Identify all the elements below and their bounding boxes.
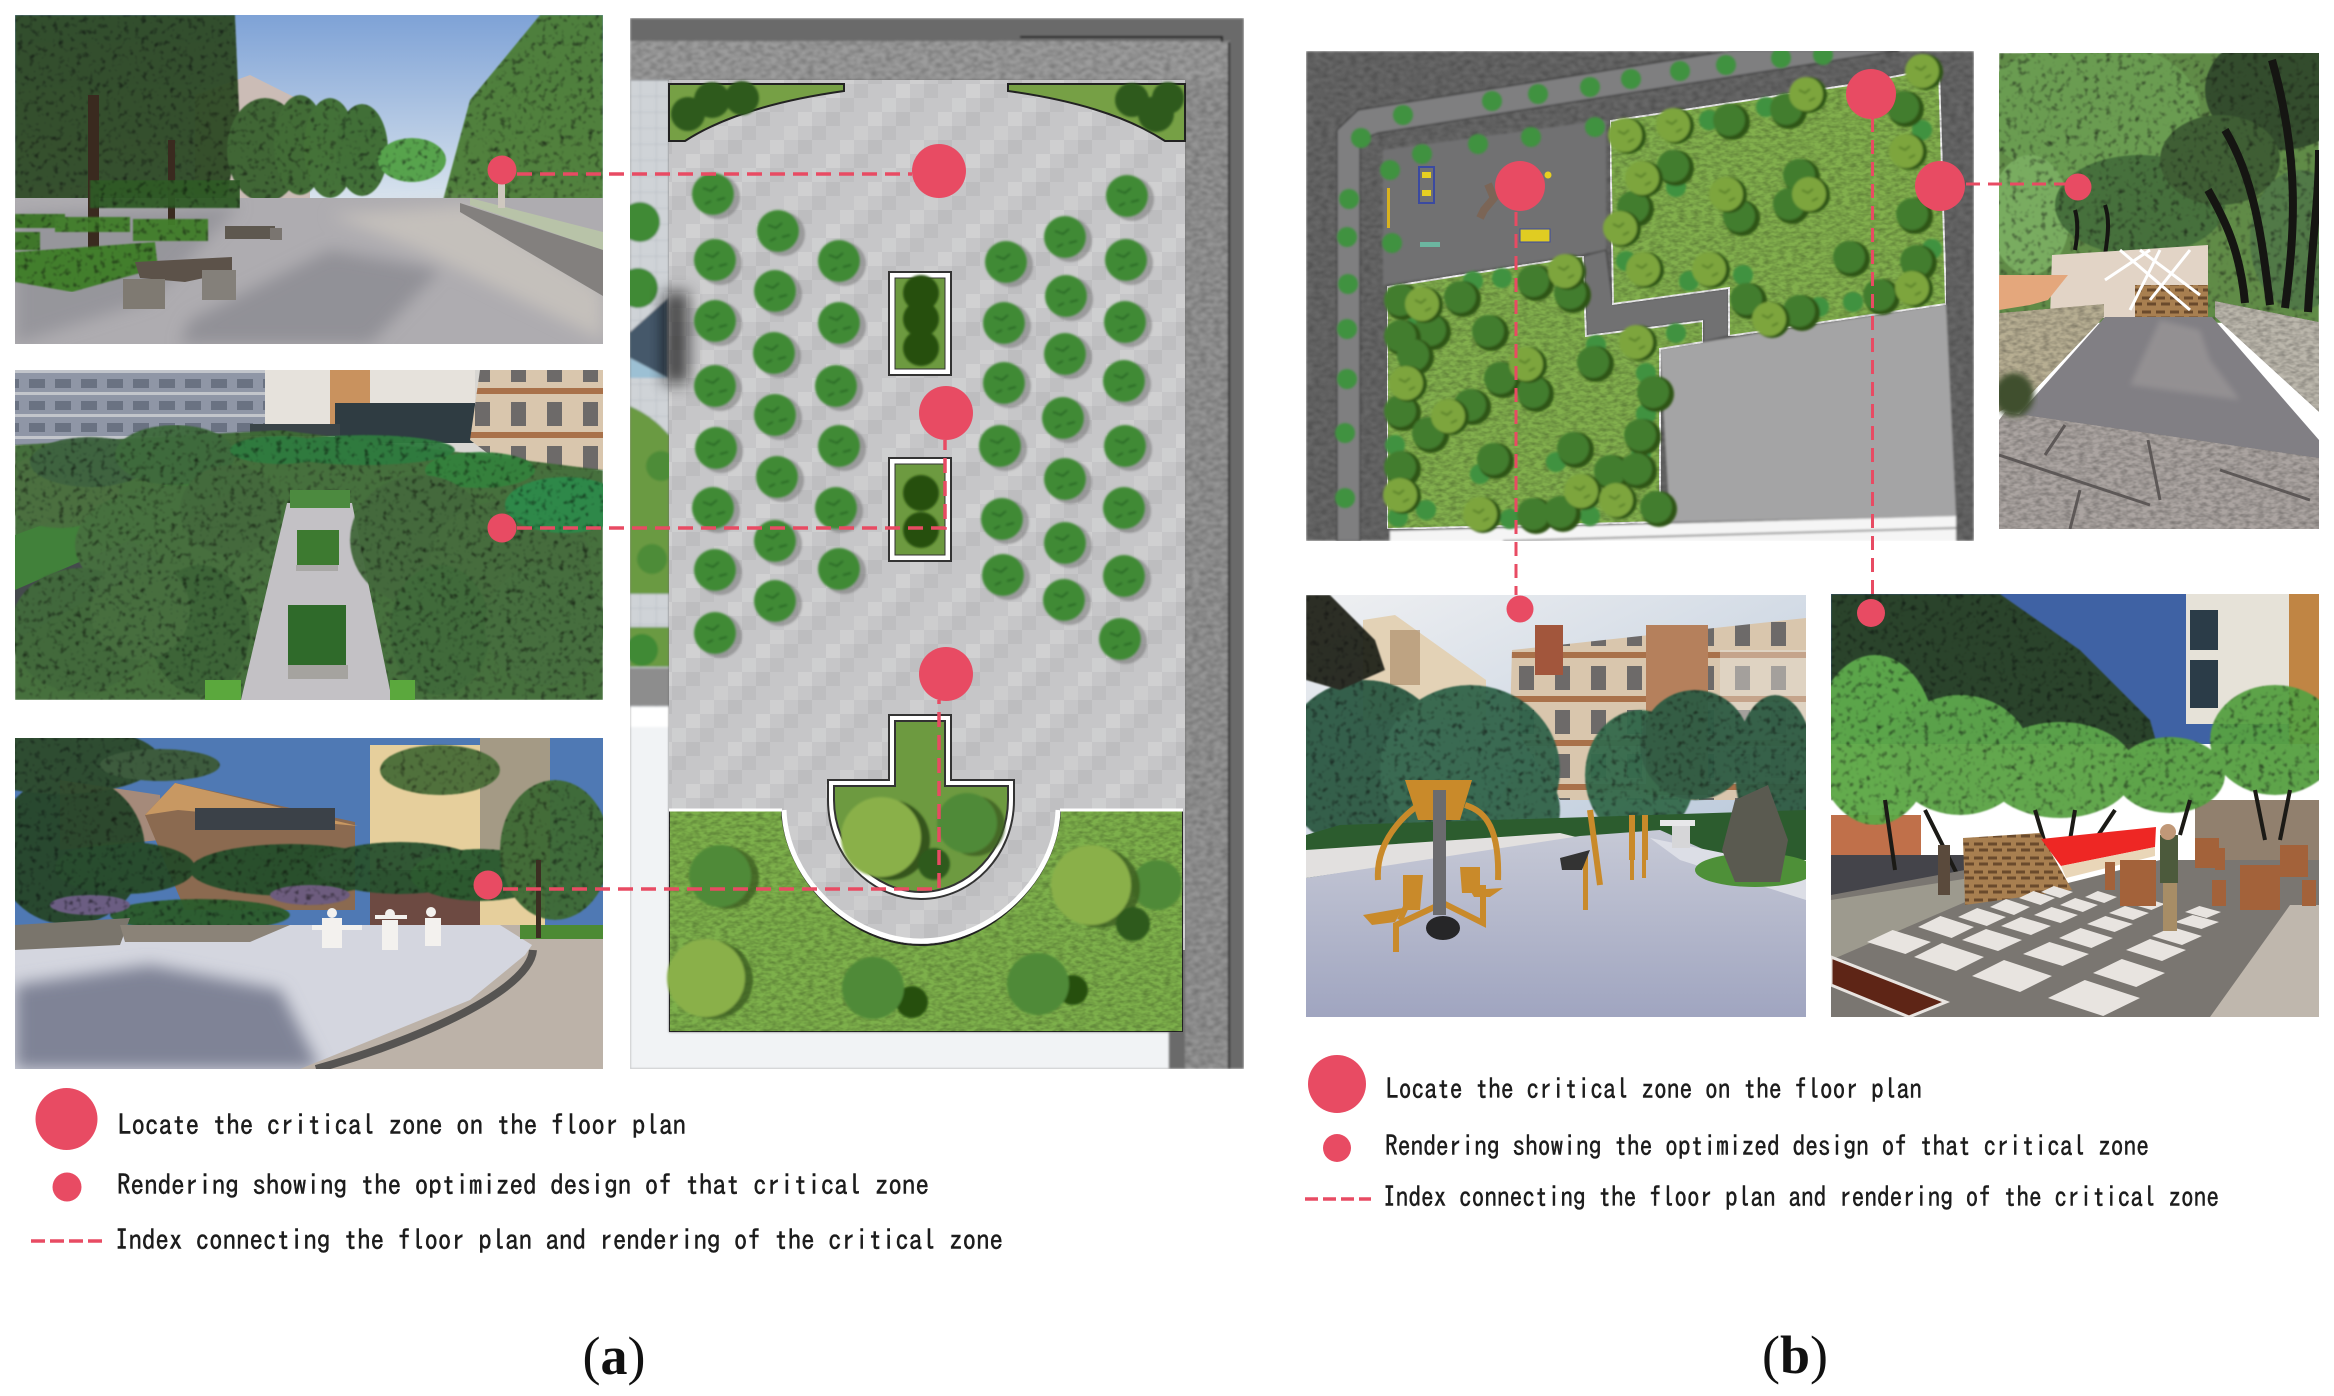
legend text: floor plan marker: Locate the critical zone on the floor plan	[1386, 1075, 1922, 1103]
legend icon: large zone marker	[1308, 1055, 1366, 1113]
paving pads	[1867, 886, 2221, 1016]
caption: (b): (b)	[1762, 1325, 1828, 1385]
planter: keyhole	[828, 715, 1014, 899]
panel: rendering B2, fitness equipment	[1280, 595, 1815, 1017]
street trees	[1335, 45, 1833, 508]
tree trunks	[2075, 60, 2319, 312]
brown strip	[1831, 957, 1946, 1017]
panel: rendering A2, aerial of tree avenue	[0, 370, 625, 700]
trees: left lawn	[1383, 254, 1686, 534]
index lines: panel B	[1516, 118, 2068, 600]
plaza trees	[692, 173, 1154, 664]
legend: panel B	[1305, 1055, 2219, 1211]
legend icon: dashed index line	[1305, 1197, 1371, 1201]
panel: floor plan B, fitness garden	[1306, 45, 1974, 541]
legend text: index line: Index connecting the floor plan and rendering of the critical zone	[115, 1226, 1003, 1254]
rectangular planters	[889, 272, 951, 561]
rock sculpture	[1695, 855, 1806, 887]
legend icon: small rendering dot	[52, 1172, 82, 1202]
caption: (a): (a)	[583, 1326, 645, 1386]
right lawn	[1610, 68, 1946, 336]
legend: panel A	[31, 1088, 1003, 1254]
panel: rendering A1, tree-lined plaza	[15, 15, 603, 344]
legend icon: dashed index line	[31, 1239, 102, 1243]
legend text: floor plan marker: Locate the critical zone on the floor plan	[118, 1111, 686, 1139]
asphalt and sidewalk frame	[630, 18, 1244, 1069]
legend text: rendering dot: Rendering showing the optimized design of that critical zone	[117, 1171, 929, 1199]
markers: panel A floor plan zones	[912, 144, 973, 701]
legend icon: large zone marker	[36, 1088, 98, 1150]
index lines: panel A	[503, 174, 945, 889]
top corner lawns	[669, 84, 1185, 141]
marker: panel B rendering dot on seating view	[1857, 599, 1885, 627]
paved plaza with chequered tiles	[669, 80, 1185, 950]
markers: panel A rendering dots	[474, 156, 516, 900]
lower lawn with semicircular path	[669, 810, 1183, 1032]
playground equipment	[1387, 167, 1552, 247]
marker: panel B rendering dot on ramp view	[2064, 174, 2092, 200]
wooden tables and person	[2105, 838, 2316, 910]
left lawn	[1387, 256, 1703, 529]
panel: rendering B1, stone ramp path	[1999, 53, 2319, 529]
tree trunks	[1885, 790, 2290, 880]
legend icon: small rendering dot	[1323, 1134, 1351, 1162]
panel: rendering B3, seating plaza with red wall	[1815, 594, 2334, 1017]
asphalt and sidewalks	[1306, 50, 1974, 541]
left edge: tiles, building and gardens	[618, 80, 1169, 1069]
building shadow	[664, 292, 688, 384]
panel: rendering A3, tai chi plaza	[0, 726, 610, 1069]
trees: right lawn	[1603, 54, 1943, 338]
marker: panel B rendering dot on fitness view	[1506, 596, 1534, 622]
markers: panel B floor plan zones	[1495, 69, 1965, 211]
legend text: index line: Index connecting the floor plan and rendering of the critical zone	[1383, 1183, 2219, 1211]
lawn trees	[667, 793, 1182, 1019]
panel: floor plan A, central plaza	[618, 18, 1244, 1069]
legend text: rendering dot: Rendering showing the optimized design of that critical zone	[1385, 1132, 2149, 1160]
red wedge wall	[2041, 827, 2156, 866]
fitness machine	[1378, 800, 1645, 952]
